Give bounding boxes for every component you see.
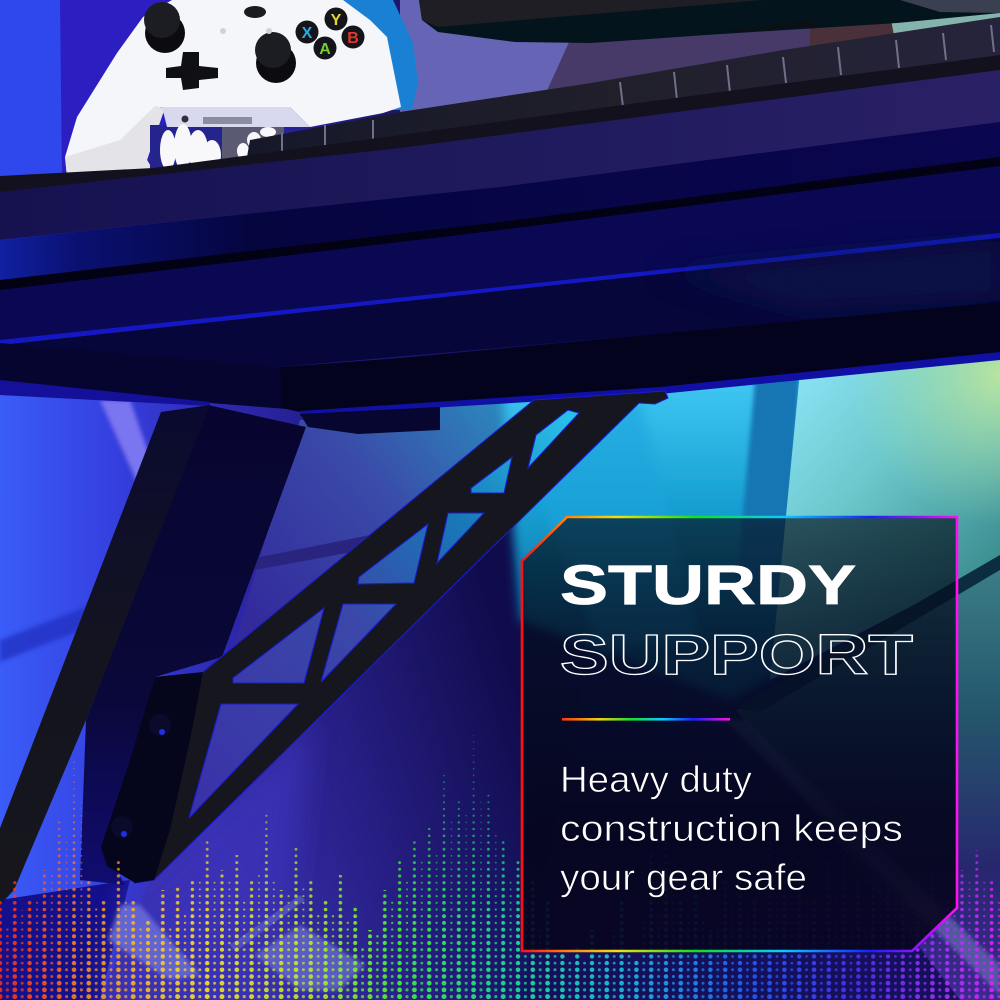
left under-desk beam [0,343,300,410]
rainbow rule [562,718,730,721]
face buttons: X [302,25,313,42]
blue controller stand [340,0,418,110]
face buttons: A [319,41,331,58]
body text: construction keeps [560,808,903,849]
equalizer dots [0,734,1000,1000]
desk underside [0,238,1000,367]
game controller [65,0,401,177]
bracket bolts [111,714,171,838]
left stick [144,2,185,53]
heading: sturdy: STURDY [560,553,856,616]
mounting plate [101,672,203,883]
panel: sturdy support [522,517,957,951]
front leg [0,405,210,905]
xbox button [244,6,266,18]
controller stand fingers [160,124,276,170]
desk lower strip [0,166,1000,342]
port bar [162,107,310,127]
body text: your gear safe [560,857,807,898]
under-desk crossbeam [280,302,1000,412]
d-pad [166,52,218,90]
rear leg [80,405,306,885]
body text: Heavy duty [560,759,753,800]
monitor base [419,0,1000,43]
LED light line [0,233,1000,345]
desk front face [0,70,1000,240]
face buttons: Y [331,12,342,29]
face buttons: B [347,30,359,47]
heading: support: SUPPORT [560,623,913,687]
small menu buttons [220,28,272,34]
desk top edge [0,55,1000,195]
mounting block [300,407,440,434]
right stick [255,32,296,83]
body text [560,759,903,898]
keyboard [247,17,1000,157]
desk shadow band [0,122,1000,287]
steel bracket [101,391,668,883]
face buttons [296,8,364,60]
